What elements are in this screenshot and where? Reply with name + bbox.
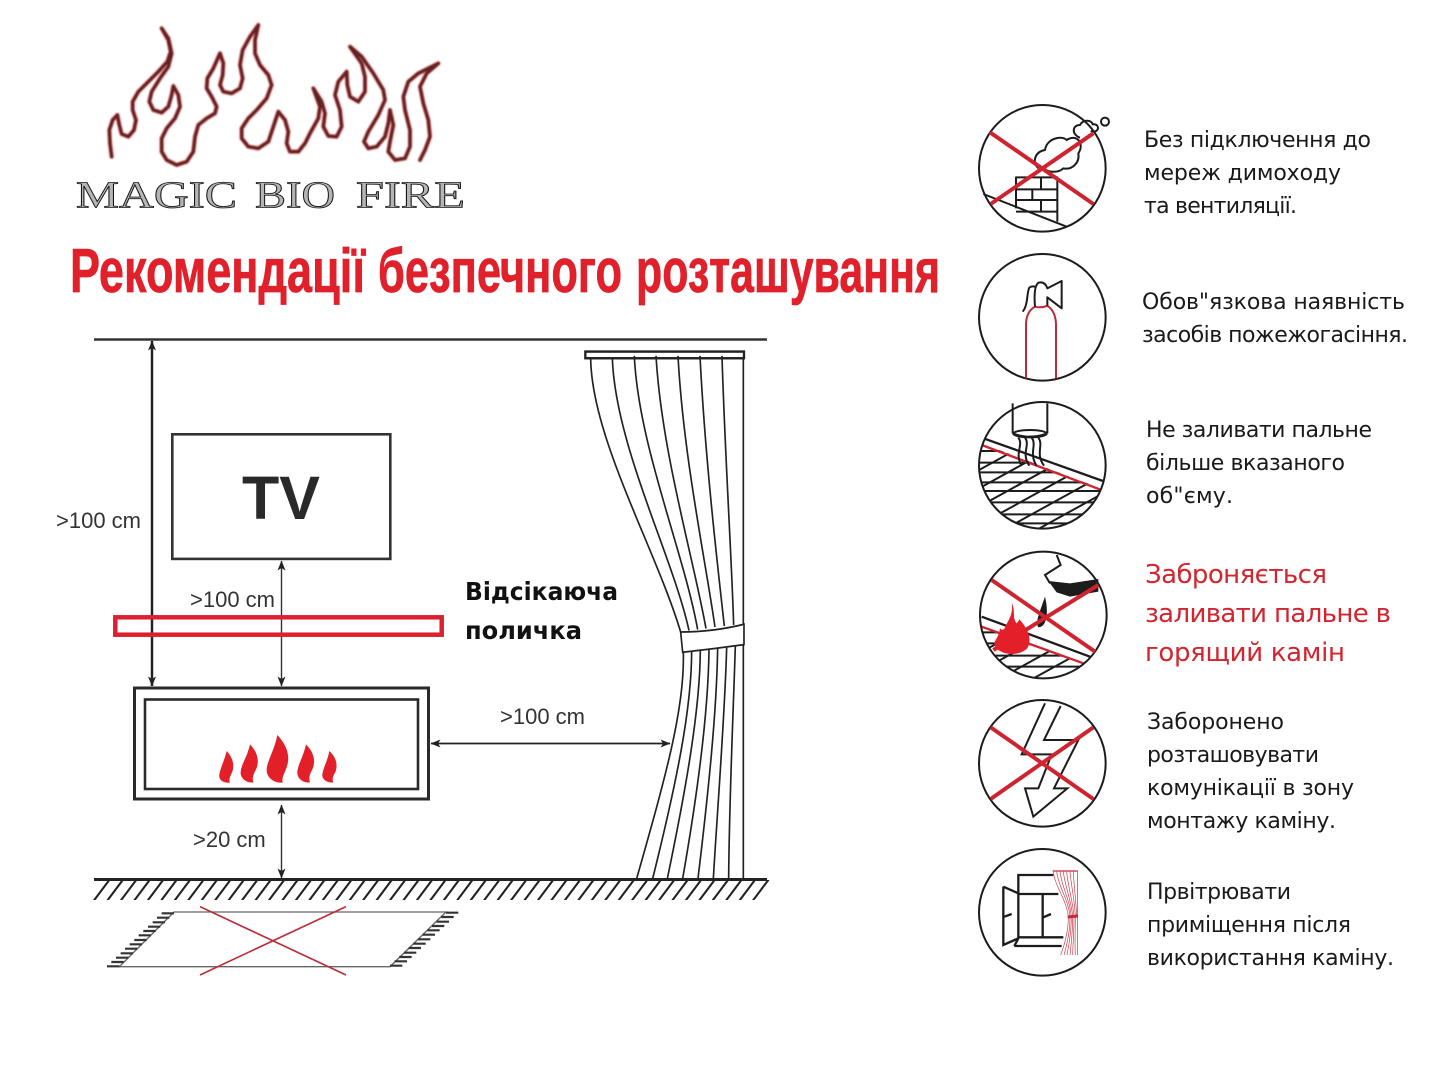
logo wordmark: BIO xyxy=(255,174,335,216)
logo wordmark: MAGIC xyxy=(76,174,237,216)
text: засобів пожежогасіння. xyxy=(1142,323,1408,348)
text: горящий камін xyxy=(1145,638,1345,668)
icon: lightning bolt crossed out xyxy=(979,700,1106,827)
text: мереж димоходу xyxy=(1144,161,1341,186)
icon: chimney crossed out xyxy=(979,105,1109,232)
text: монтажу каміну. xyxy=(1147,809,1336,834)
logo wordmark xyxy=(76,174,465,216)
crossed-out rug xyxy=(107,907,458,975)
text: комунікації в зону xyxy=(1147,776,1354,801)
text: розташовувати xyxy=(1147,743,1319,768)
text: об"єму. xyxy=(1146,484,1233,509)
text: Заброняється xyxy=(1145,560,1327,590)
text: Не заливати пальне xyxy=(1146,418,1372,443)
TV box: TV xyxy=(242,464,320,532)
floor with hatching xyxy=(94,880,767,890)
title: безпечного xyxy=(378,237,622,306)
text: Обов"язкова наявність xyxy=(1142,290,1405,315)
rule 3: do not overfill xyxy=(978,401,1371,530)
label: TV clearance: >100 cm xyxy=(190,587,275,612)
icon: fuel on flame crossed out xyxy=(979,550,1108,680)
text: використання каміну. xyxy=(1147,946,1394,971)
text: Заборонено xyxy=(1147,710,1284,735)
fireplace xyxy=(134,688,428,799)
rule 5: no utilities in zone xyxy=(979,700,1354,834)
title: розташування xyxy=(636,237,940,306)
arrow: TV to fireplace xyxy=(280,561,282,686)
curtain xyxy=(585,352,744,879)
rule 4: no fuel in burning fireplace xyxy=(979,550,1390,680)
rule 2: extinguisher xyxy=(979,254,1408,381)
text: Првітрювати xyxy=(1147,880,1291,905)
reflecting shelf xyxy=(115,617,442,635)
logo: Magic Bio Fire xyxy=(76,25,465,217)
label: floor clearance: >20 cm xyxy=(193,827,266,852)
text: приміщення після xyxy=(1147,913,1351,938)
arrow: fireplace to curtain xyxy=(431,742,670,744)
TV box xyxy=(172,434,390,559)
text: та вентиляції. xyxy=(1144,194,1297,219)
rule 1: no chimney xyxy=(979,105,1371,232)
fireplace flames xyxy=(219,735,337,783)
title: Рекомендації xyxy=(70,237,366,306)
arrow: fireplace to floor xyxy=(280,805,282,878)
arrow: ceiling to fireplace xyxy=(151,341,153,686)
icon: fuel pouring into burner xyxy=(978,401,1107,530)
label: curtain clearance: >100 cm xyxy=(500,704,585,729)
rule 6: ventilate xyxy=(979,849,1394,976)
text: заливати пальне в xyxy=(1145,599,1391,629)
logo flames xyxy=(109,25,438,165)
icon: fire extinguisher xyxy=(979,254,1106,381)
text: більше вказаного xyxy=(1146,451,1345,476)
title xyxy=(70,237,940,306)
shelf label xyxy=(465,577,618,645)
shelf label: поличка xyxy=(465,616,582,645)
shelf label: Відсікаюча xyxy=(465,577,618,606)
icon: open window with curtain xyxy=(979,849,1106,976)
ceiling line xyxy=(94,338,767,341)
label: ceiling clearance: >100 cm xyxy=(56,508,141,533)
logo wordmark: FIRE xyxy=(356,174,465,216)
text: Без підключення до xyxy=(1144,128,1371,153)
clearance diagram xyxy=(56,340,767,975)
